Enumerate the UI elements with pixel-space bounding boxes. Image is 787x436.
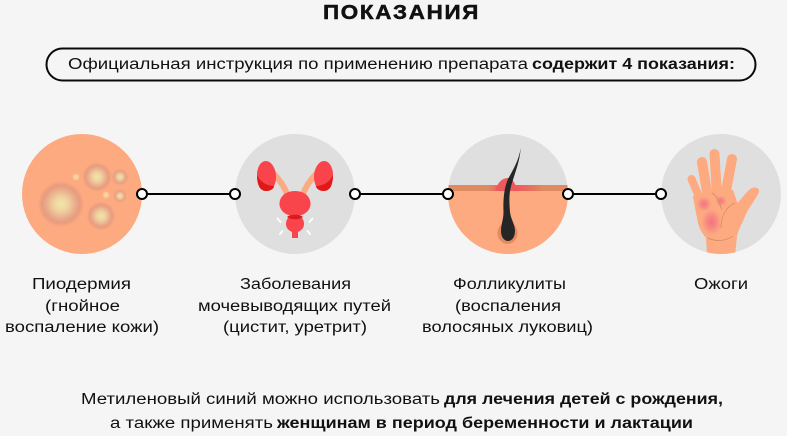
label: pyoderma: (гнойное [45,298,120,315]
label: folliculitis [422,276,593,336]
connector 3 [563,189,666,199]
callout: official instruction: Официальная инструкция по применению препарата [68,56,528,73]
label: folliculitis: (воспаления [455,298,561,315]
callout: official instruction [46,48,756,80]
icon: pyoderma skin [22,134,142,254]
title: ПОКАЗАНИЯ [323,2,480,24]
label: folliculitis: волосяных луковиц) [422,319,593,336]
label: urinary diseases [198,276,391,336]
footer note [81,391,723,432]
label: urinary diseases: мочевыводящих путей [198,298,391,315]
connector 2 [350,189,453,199]
footer note: а также применять [110,415,273,432]
connector 1 [137,189,240,199]
icon: hair follicle [448,134,568,254]
label: pyoderma: Пиодермия [32,276,131,293]
label: burns: Ожоги [694,276,748,293]
label: folliculitis: Фолликулиты [453,276,566,293]
icon: urinary system [235,134,355,254]
footer note: женщинам в период беременности и лактации [276,415,693,432]
label: pyoderma: воспаление кожи) [5,319,159,336]
footer note: Метиленовый синий можно использовать [81,391,440,408]
label: pyoderma [5,276,159,336]
label: urinary diseases: Заболевания [240,276,351,293]
callout: official instruction: содержит 4 показания: [532,56,735,73]
label: urinary diseases: (цистит, уретрит) [223,319,367,336]
footer note: для лечения детей с рождения, [444,391,723,408]
icon: burned hand [661,134,781,256]
